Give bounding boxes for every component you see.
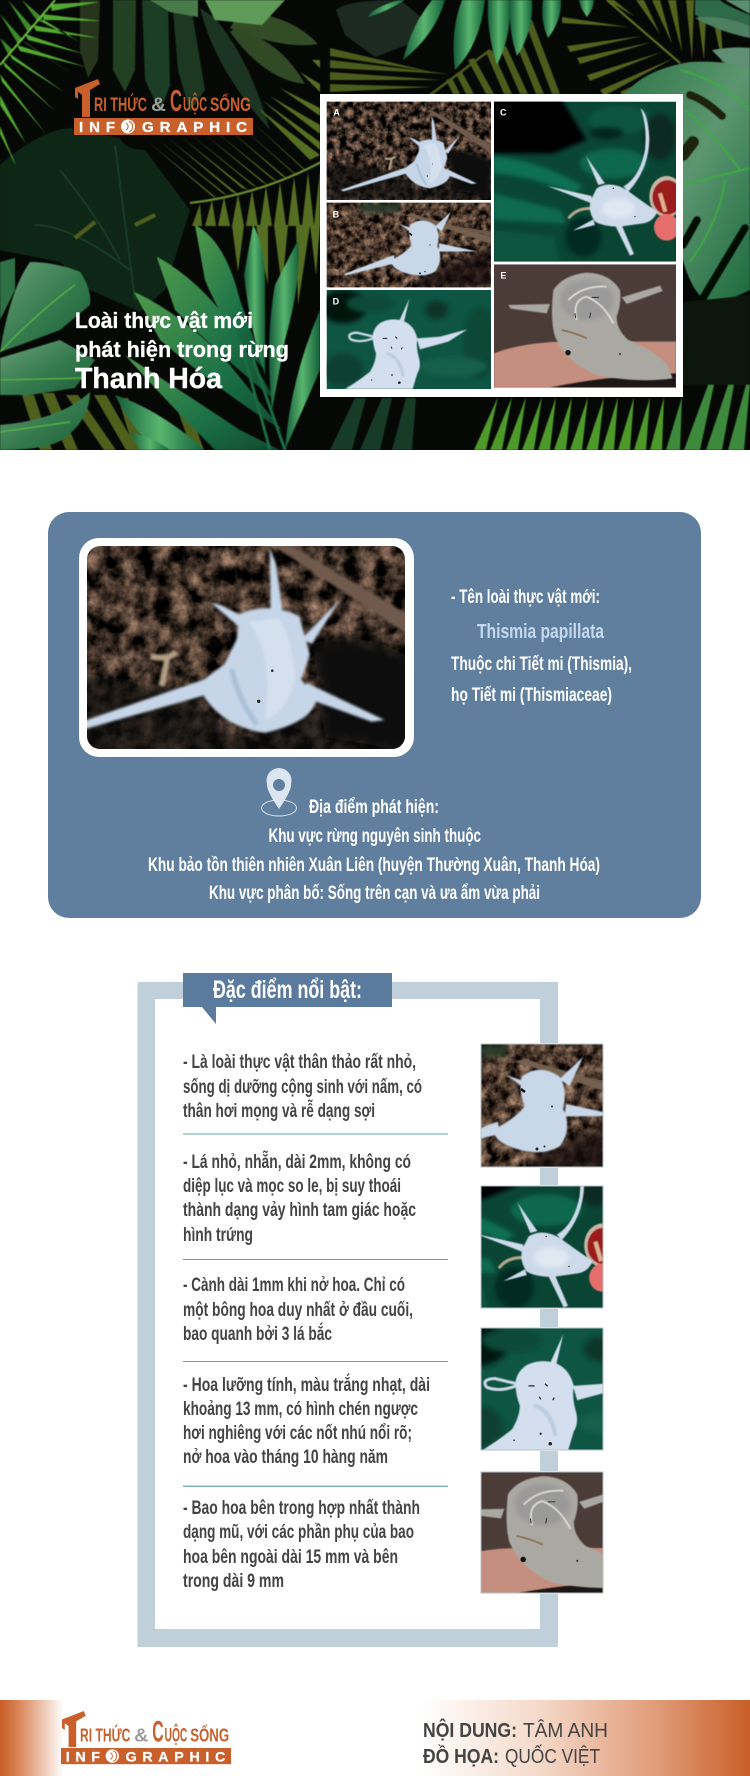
photo collage panel A-E: D	[333, 296, 340, 306]
footer	[0, 1700, 750, 1776]
species name text	[451, 587, 632, 706]
logo: Tri Thuc & Cuoc Song Infographic: UỘC	[183, 92, 207, 116]
item 2	[183, 1149, 416, 1246]
species name text: họ Tiết mi (Thismiaceae)	[451, 685, 612, 706]
bright palm frond top left	[0, 2, 101, 166]
footer logo: &	[134, 1725, 148, 1745]
item 4: - Hoa lưỡng tính, màu trắng nhạt, dài	[183, 1372, 430, 1396]
item 1: thân hơi mọng và rễ dạng sợi	[183, 1098, 375, 1122]
photo collage panel A-E: A	[333, 108, 340, 118]
title: Loài thực vật mới	[75, 308, 253, 333]
logo: Tri Thuc & Cuoc Song Infographic	[74, 79, 253, 136]
green blades top centre	[368, 0, 594, 70]
olive palm frond top right	[562, 0, 724, 96]
dark vertical blades top left	[80, 0, 318, 130]
photo collage panel A-E: B	[333, 209, 340, 219]
panel: description	[2, 512, 701, 918]
dark leaf behind top blades	[336, 0, 425, 57]
footer credits	[423, 1718, 608, 1768]
item 5: dạng mũ, với các phần phụ của bao	[183, 1521, 414, 1543]
footer logo: INF	[66, 1749, 100, 1765]
item 5: - Bao hoa bên trong hợp nhất thành	[183, 1497, 420, 1519]
green palm fronds bottom right	[330, 385, 750, 450]
heading tab: Đặc điểm nổi bật:	[213, 976, 362, 1004]
item 4: nở hoa vào tháng 10 hàng năm	[183, 1446, 388, 1468]
header: jungle foliage background	[0, 0, 750, 450]
item 2: thành dạng vảy hình tam giác hoặc	[183, 1199, 416, 1221]
icon: location pin	[262, 768, 296, 816]
species name text: - Tên loài thực vật mới:	[451, 587, 600, 608]
photo collage panel A-E: E	[500, 270, 506, 280]
green blades bottom centre	[115, 225, 320, 450]
footer credits: NỘI DUNG:	[423, 1718, 517, 1742]
item 3: - Cành dài 1mm khi nở hoa. Chỉ có	[183, 1274, 405, 1296]
footer logo	[61, 1711, 231, 1765]
thumbnail 3	[480, 1327, 604, 1451]
item 1: - Là loài thực vật thân thảo rất nhỏ,	[183, 1051, 416, 1073]
footer logo: C	[152, 1715, 164, 1748]
logo: Tri Thuc & Cuoc Song Infographic: &	[151, 95, 166, 116]
logo: Tri Thuc & Cuoc Song Infographic: GRAPHIC	[142, 119, 247, 136]
footer logo: UỘC	[165, 1724, 187, 1746]
main flower photo	[79, 538, 414, 757]
item 2: - Lá nhỏ, nhẵn, dài 2mm, không có	[183, 1149, 411, 1173]
item 5	[183, 1497, 420, 1592]
species name text: Thuộc chi Tiết mi (Thismia),	[451, 654, 632, 675]
photo collage panel A-E	[320, 94, 684, 397]
dark monstera leaf left	[0, 128, 190, 312]
item 1	[183, 1051, 422, 1122]
thumbnail 2	[480, 1185, 604, 1309]
photo collage panel A-E: C	[500, 108, 507, 118]
title: Thanh Hóa	[75, 363, 223, 395]
item 4: khoảng 13 mm, có hình chén ngược	[183, 1398, 418, 1420]
footer logo: GRAPHIC	[126, 1749, 225, 1765]
location text: Địa điểm phát hiện:	[309, 797, 439, 818]
footer credits: ĐỒ HỌA:	[423, 1744, 499, 1768]
footer logo: SỐNG	[190, 1724, 229, 1745]
item 1: sống dị dưỡng cộng sinh với nấm, có	[183, 1076, 422, 1098]
item 3	[183, 1274, 413, 1345]
thumbnail 4	[480, 1471, 604, 1594]
item 5: hoa bên ngoài dài 15 mm và bên	[183, 1546, 398, 1568]
dark leaf bottom right	[683, 295, 750, 385]
title	[75, 308, 289, 395]
heading tab	[183, 973, 392, 1024]
olive palm frond centre-left	[146, 60, 320, 305]
footer credits: TÂM ANH	[523, 1719, 608, 1742]
logo: Tri Thuc & Cuoc Song Infographic: SỐNG	[210, 94, 251, 116]
item 5: trong dài 9 mm	[183, 1570, 284, 1592]
item 3: bao quanh bởi 3 lá bắc	[183, 1321, 332, 1345]
item 2: hình trứng	[183, 1224, 253, 1246]
title: phát hiện trong rừng	[75, 337, 289, 362]
location text: Khu vực rừng nguyên sinh thuộc	[268, 826, 481, 847]
logo: Tri Thuc & Cuoc Song Infographic: RI THỨC	[94, 94, 147, 116]
olive palm frond top centre	[330, 20, 560, 94]
item 4	[183, 1372, 430, 1468]
footer credits: QUỐC VIỆT	[505, 1744, 600, 1768]
item 4: hơi nghiêng với các nốt nhú nổi rõ;	[183, 1422, 412, 1444]
species name text: Thismia papillata	[477, 620, 604, 643]
logo: Tri Thuc & Cuoc Song Infographic: INF	[79, 119, 115, 136]
right monstera leaf	[620, 0, 750, 301]
green monstera leaf bottom left	[0, 258, 95, 450]
thumbnail 1	[480, 1043, 604, 1168]
location text: Khu vực phân bố: Sống trên cạn và ưa ẩm vừa phải	[209, 883, 540, 904]
item 2: diệp lục và mọc so le, bị suy thoái	[183, 1175, 401, 1197]
location text	[148, 797, 600, 904]
footer logo: RI THỨC	[80, 1724, 130, 1745]
logo: Tri Thuc & Cuoc Song Infographic: C	[170, 83, 182, 118]
panel: highlights frame	[138, 973, 604, 1647]
item 3: một bông hoa duy nhất ở đầu cuối,	[183, 1299, 413, 1321]
